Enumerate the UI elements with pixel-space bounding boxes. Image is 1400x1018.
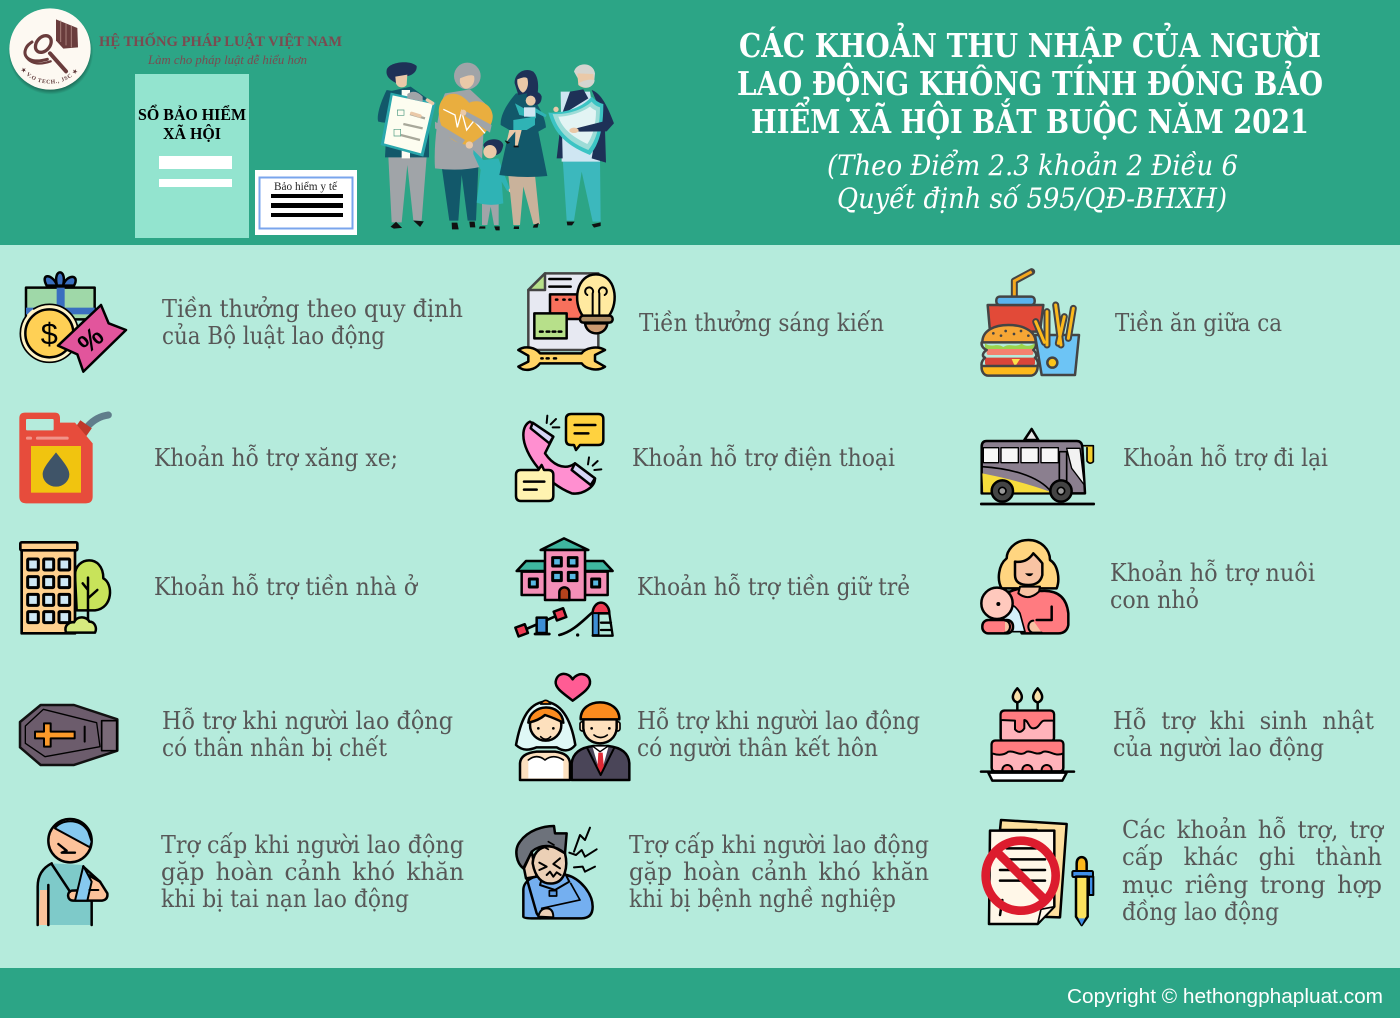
grandfather with shield <box>548 64 614 228</box>
subtitle: legal basis: Quyết định số 595/QĐ-BHXH) <box>837 182 1227 215</box>
text: Khoản hỗ trợ nuôi <box>1110 559 1315 587</box>
panel: header <box>0 0 1400 245</box>
item: travel allowance <box>980 429 1328 505</box>
text <box>629 831 929 913</box>
item: occupational disease allowance <box>516 826 929 918</box>
text <box>1113 707 1374 762</box>
mother with baby <box>499 70 547 229</box>
text <box>1110 559 1315 614</box>
grandmother with heart <box>435 63 495 229</box>
item: bonus <box>20 272 463 372</box>
text: có thân nhân bị chết <box>162 734 387 762</box>
text <box>162 295 463 350</box>
item: phone allowance <box>516 414 895 501</box>
man with clipboard <box>378 62 436 228</box>
child <box>473 139 513 230</box>
item: fuel allowance <box>19 413 398 503</box>
item: work accident allowance <box>38 819 464 925</box>
logo: ★ V.O TECH., JSC ★ <box>21 68 78 84</box>
health insurance card: Bảo hiểm y tế <box>274 180 338 193</box>
icon: phone and chat bubbles <box>516 414 603 501</box>
illustration: family with insurance <box>378 62 614 230</box>
text <box>161 831 464 913</box>
subtitle: legal basis <box>827 149 1238 215</box>
text: của người lao động <box>1113 734 1324 762</box>
brand name: HỆ THỐNG PHÁP LUẬT VIỆT NAM <box>99 32 342 50</box>
item: innovation bonus <box>518 273 884 370</box>
text <box>162 707 453 762</box>
text: gặp hoàn cảnh khó khăn <box>629 858 929 886</box>
icon: injured worker <box>38 819 107 925</box>
item: childcare allowance <box>515 538 910 637</box>
social insurance book <box>135 74 249 238</box>
text: Tiền thưởng sáng kiến <box>639 309 884 337</box>
item: family wedding support <box>516 674 920 780</box>
copyright: Copyright © hethongphapluat.com <box>1067 986 1383 1008</box>
text: Khoản hỗ trợ tiền giữ trẻ <box>637 573 910 601</box>
subtitle: legal basis: (Theo Điểm 2.3 khoản 2 Điều 6 <box>827 149 1238 182</box>
text: cấp khác ghi thành <box>1122 843 1382 871</box>
icon: coffin <box>20 705 117 765</box>
item: birthday support <box>981 688 1374 781</box>
icon: mother and baby <box>981 540 1068 633</box>
text <box>1122 816 1384 926</box>
icon: kindergarten and playground <box>515 538 613 637</box>
icon: burger, drink and fries <box>981 272 1079 376</box>
text: đồng lao động <box>1122 898 1279 926</box>
social insurance book: SỔ BẢO HIỂM <box>138 104 246 124</box>
text: Khoản hỗ trợ tiền nhà ở <box>154 573 418 601</box>
text: Khoản hỗ trợ xăng xe; <box>154 444 398 472</box>
text: Hỗ trợ khi người lao động <box>162 707 453 735</box>
text: mục riêng trong hợp <box>1122 871 1382 899</box>
social insurance book: XÃ HỘI <box>163 124 221 143</box>
item: child-rearing allowance <box>981 540 1315 633</box>
icon: fuel can <box>19 413 108 503</box>
icon: birthday cake <box>981 688 1074 781</box>
item: housing allowance <box>20 542 418 633</box>
icon: gift, coin and voucher: $ <box>41 317 58 351</box>
icon: document, bulb and wrench <box>518 273 615 370</box>
item: other allowances <box>986 816 1384 926</box>
text: khi bị tai nạn lao động <box>161 885 409 913</box>
text: có người thân kết hôn <box>637 734 878 762</box>
icon: gift, coin and voucher <box>20 272 126 372</box>
brand slogan: Làm cho pháp luật dễ hiểu hơn <box>147 53 307 67</box>
item: meal allowance <box>981 272 1282 376</box>
text: Tiền thưởng theo quy định <box>162 295 463 323</box>
text: Các khoản hỗ trợ, trợ <box>1122 816 1384 844</box>
icon: prohibited document and pen <box>986 820 1093 925</box>
text: khi bị bệnh nghề nghiệp <box>629 885 896 913</box>
item: bereavement support <box>20 705 453 765</box>
title <box>737 21 1323 141</box>
icon: bus <box>980 429 1095 505</box>
text: con nhỏ <box>1110 586 1199 614</box>
text: gặp hoàn cảnh khó khăn <box>161 858 464 886</box>
icon: sick worker <box>516 826 597 918</box>
text <box>637 707 920 762</box>
icon: gift, coin and voucher: % <box>72 321 110 359</box>
text: Hỗ trợ khi người lao động <box>637 707 920 735</box>
panel: footer <box>0 968 1400 1018</box>
icon: wedding couple <box>516 674 629 780</box>
text: Hỗ trợ khi sinh nhật <box>1113 707 1374 735</box>
icon: apartment and tree <box>20 542 110 633</box>
text: Khoản hỗ trợ đi lại <box>1123 444 1328 472</box>
health insurance card <box>255 170 357 235</box>
text: Tiền ăn giữa ca <box>1115 309 1282 337</box>
text: Khoản hỗ trợ điện thoại <box>632 444 895 472</box>
text: Trợ cấp khi người lao động <box>161 831 464 859</box>
text: của Bộ luật lao động <box>162 322 385 350</box>
text: Trợ cấp khi người lao động <box>629 831 929 859</box>
logo <box>8 8 92 94</box>
